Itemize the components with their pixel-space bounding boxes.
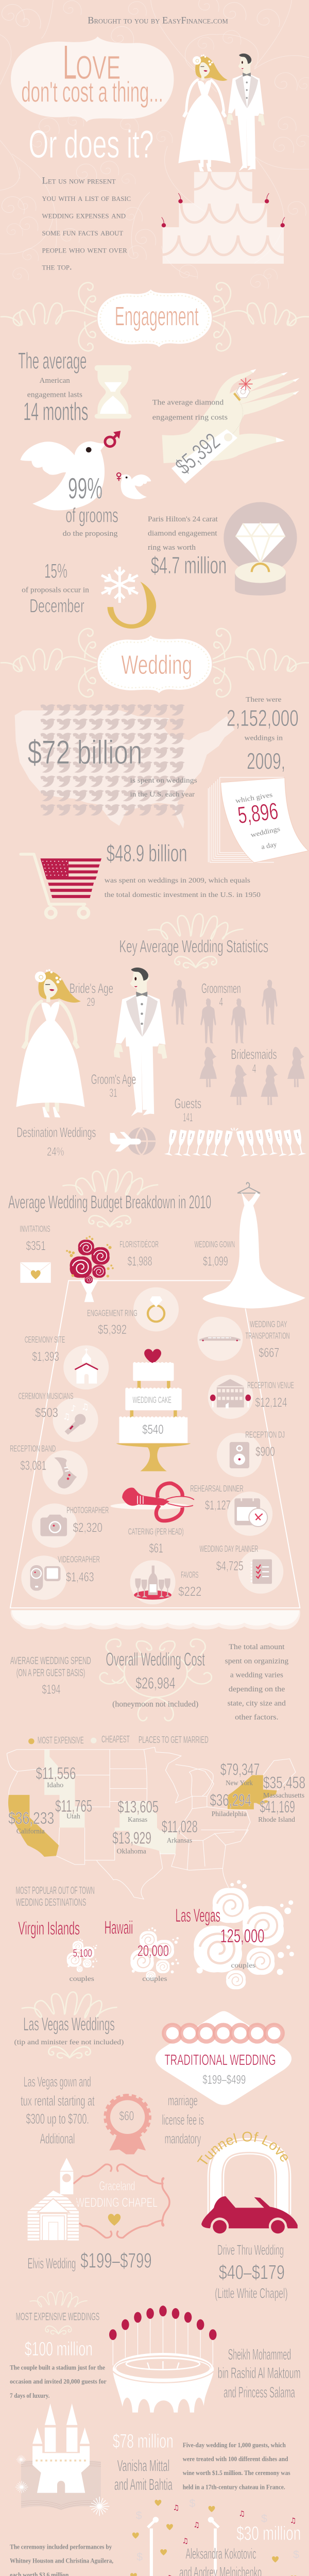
title: love don't cost a thing — [11, 36, 174, 122]
intro text — [42, 176, 131, 272]
icon: tear-off calendar: a day — [261, 840, 278, 851]
item: wedding day planner: $4,725 — [216, 1559, 244, 1573]
destination: las vegas: 125,000 — [220, 1925, 265, 1946]
stat: bride's age: 29 — [87, 995, 95, 1009]
map legend: MOST EXPENSIVE — [38, 1735, 84, 1746]
item: reception venue — [208, 1375, 294, 1419]
map labels: state costs: Massachusetts — [263, 1791, 304, 1799]
heading: most popular out of town destinations — [16, 1885, 95, 1908]
stat: 72 billion: $72 billion — [28, 734, 142, 771]
item: reception dj — [217, 1430, 285, 1477]
engagement banner — [1, 282, 308, 351]
text: ceremony performances: Whitney Houston and Christina Aguilera, — [10, 2557, 113, 2565]
stat: paris hilton ring: $4.7 million — [151, 552, 227, 579]
text: cost varies note: depending on the — [229, 1685, 285, 1693]
icon: microphones with hearts, notes and dollars: ♫ — [173, 2504, 179, 2512]
title text: don't cost a thing... — [21, 76, 163, 109]
destination: las vegas: couples — [231, 1961, 256, 1970]
wedding cake with cherries — [162, 172, 285, 264]
stat: destination weddings: 24% — [47, 1145, 64, 1158]
item: ceremony musicians: ♫ — [63, 1412, 71, 1421]
title banner — [11, 37, 174, 122]
stat: drive thru wedding — [215, 2242, 288, 2301]
map labels: state costs: New York — [226, 1779, 253, 1787]
item: rehearsal dinner lobster: REHEARSAL DINNER — [190, 1483, 244, 1494]
icon: small dove with female symbol — [117, 473, 151, 499]
icon: microphones with hearts, notes and dollars: $ — [293, 2549, 299, 2561]
item: videographer — [21, 1554, 100, 1600]
title text — [21, 36, 163, 109]
bridesmaids silhouettes — [199, 1046, 305, 1105]
bride on cake — [178, 55, 231, 172]
text: cost varies note: The total amount — [229, 1643, 285, 1651]
map legend: CHEAPEST — [101, 1734, 130, 1745]
map labels: state costs: Kansas — [128, 1816, 147, 1823]
text: five-day wedding: wine worth $1.5 million. The ceremony was — [183, 2469, 290, 2477]
text: marriage license fee: marriage — [168, 2093, 198, 2108]
item: catering: CATERING (PER HEAD) — [128, 1527, 184, 1536]
stat: 99 percent of grooms — [63, 472, 118, 538]
intro text: wedding expenses and — [42, 210, 126, 221]
engagement length text: American — [40, 377, 70, 385]
us map: wedding cost by state — [7, 1747, 296, 1899]
wedding: 100 million: The couple built a stadium just for the — [10, 2364, 105, 2371]
stat: 48.9 billion: the total domestic investment in the U.S. in 1950 — [105, 891, 261, 899]
item: engagement ring — [87, 1287, 179, 1337]
illustration: bride — [16, 969, 85, 1117]
ring cost text: The average diamond — [152, 399, 224, 407]
intro text: some fun facts about — [42, 227, 123, 238]
text: gown and tux rental: Additional — [40, 2131, 75, 2146]
subtitle: or does it: Or does it? — [28, 123, 153, 166]
text: cost varies note — [225, 1643, 289, 1722]
item: ceremony site — [25, 1334, 109, 1389]
item: ceremony musicians: CEREMONY MUSICIANS — [19, 1391, 73, 1401]
item: reception band: RECEPTION BAND — [10, 1444, 56, 1454]
icon: graceland wedding chapel sign — [73, 2164, 169, 2238]
heading: las vegas weddings: Las Vegas Weddings — [23, 2013, 115, 2035]
groom on cake — [227, 54, 265, 171]
icon: white chapel — [28, 2158, 79, 2241]
icon: microphones with hearts, notes and dollars: $ — [136, 2510, 142, 2522]
us map with dove grid — [15, 704, 234, 828]
item: transportation — [197, 1317, 289, 1361]
text: five-day wedding: held in a 17th-century chateau in France. — [183, 2484, 285, 2490]
icon: hand with ring and price tag: $5,392 — [170, 428, 225, 479]
destination: hawaii — [105, 1917, 179, 1983]
stat: bride's age — [70, 980, 113, 1009]
stat: 72 billion — [28, 734, 197, 799]
bridesmaids silhouettes: 4 — [252, 1062, 256, 1075]
map labels: state costs: Idaho — [47, 1781, 63, 1789]
icon: microphones with hearts, notes and dollars: ♫ — [182, 2537, 188, 2546]
destination: las vegas — [176, 1880, 294, 1989]
map labels: state costs: Arkansas — [167, 1837, 192, 1844]
heading: most expensive weddings — [16, 2291, 99, 2334]
stat: bride's age: Bride's Age — [70, 980, 113, 996]
icon: graceland wedding chapel sign: WEDDING CHAPEL — [76, 2196, 158, 2210]
vegas sign: traditional wedding — [156, 2011, 291, 2105]
stat: overall wedding cost: (honeymoon not included) — [112, 1700, 198, 1708]
stat: 72 billion: is spent on weddings — [130, 776, 197, 785]
icon: license badge: $60 — [119, 2109, 134, 2123]
map labels: state costs: Utah — [66, 1812, 80, 1820]
stat: 15 percent of proposals in december: 15% — [44, 560, 67, 582]
stat: elvis wedding: Elvis Wedding — [28, 2255, 76, 2272]
stat: average wedding spend: (ON A PER GUEST BASIS) — [16, 1668, 85, 1679]
engagement length text — [18, 348, 88, 426]
text: gown and tux rental: Las Vegas gown and — [24, 2074, 91, 2090]
stat: groom's age — [91, 1071, 136, 1099]
map labels: state costs: $13,929 — [112, 1829, 151, 1848]
stat: destination weddings — [17, 1125, 96, 1158]
item: wedding day planner — [200, 1544, 283, 1594]
map labels: state costs: Rhode Island — [258, 1816, 295, 1823]
table cloth — [11, 1610, 300, 1630]
stat: 99 percent of grooms: of grooms — [65, 504, 118, 527]
item: engagement ring: ENGAGEMENT RING — [87, 1308, 138, 1318]
engagement length text: engagement lasts — [27, 391, 82, 399]
stat: 72 billion: in the U.S. each year — [130, 790, 195, 799]
icon: shopping cart with us flag — [21, 854, 101, 918]
item: calendar and clock — [227, 1492, 272, 1536]
wedding banner: Wedding — [121, 650, 192, 680]
heading: most popular out of town destinations: WEDDING DESTINATIONS — [16, 1897, 86, 1908]
brought to you by line: Brought to you by EasyFinance.com — [88, 15, 228, 26]
stat: paris hilton ring: ring was worth — [148, 544, 196, 552]
icon: microphones with hearts, notes and dollars — [114, 2498, 299, 2576]
text: marriage license fee — [162, 2093, 204, 2146]
stat: 15 percent of proposals in december: December — [29, 596, 84, 617]
destination: virgin islands: 5,100 — [73, 1946, 92, 1959]
wedding: 100 million — [10, 2338, 107, 2399]
item: videographer: VIDEOGRAPHER — [58, 1554, 100, 1564]
item: catering — [128, 1527, 184, 1555]
map labels: state costs: Philadelphia — [212, 1810, 247, 1818]
stat: 48.9 billion — [105, 840, 261, 899]
groomsmen silhouettes: Groomsmen — [201, 980, 241, 996]
map labels: state costs — [8, 1760, 305, 1855]
text: cost varies note: other factors. — [235, 1714, 279, 1722]
stat: average wedding spend — [10, 1655, 91, 1697]
stat: overall wedding cost: $26,984 — [135, 1674, 176, 1692]
icon: row of champagne flutes — [164, 1128, 306, 1157]
stat: weddings in 2009: weddings in — [244, 734, 283, 742]
map labels: state costs: $13,605 — [117, 1798, 159, 1817]
text: gown and tux rental — [21, 2074, 95, 2146]
stat: average wedding spend: AVERAGE WEDDING SPEND — [10, 1655, 91, 1667]
item: reception band: $3,081 — [20, 1459, 46, 1473]
stat: overall wedding cost — [106, 1648, 205, 1708]
item: ceremony musicians: ♪ — [71, 1403, 76, 1413]
stat: overall wedding cost: Overall Wedding Cost — [106, 1648, 205, 1670]
destination: las vegas: Las Vegas — [176, 1905, 220, 1926]
icon: graceland wedding chapel sign: Graceland — [99, 2179, 135, 2194]
stat: 48.9 billion: $48.9 billion — [107, 840, 187, 867]
icon: tunnel of love with car: Tunnel Of Love — [197, 2132, 288, 2165]
ring cost text — [152, 399, 228, 421]
icon: stadium with balloons — [109, 2306, 217, 2413]
icon: plane and globe — [110, 1127, 156, 1155]
item: wedding cake on stand — [116, 1349, 191, 1471]
bridesmaids silhouettes: Bridesmaids — [231, 1046, 277, 1062]
engagement length text: The average — [18, 348, 87, 374]
decorative swirls background — [0, 0, 309, 289]
destination: hawaii: 20,000 — [138, 1943, 169, 1959]
stat: groom's age: 31 — [109, 1086, 117, 1099]
intro text: Let us now present — [42, 176, 116, 186]
text: MOST POPULAR OUT OF TOWN — [16, 1885, 95, 1896]
item: wedding gown: $1,099 — [203, 1255, 228, 1268]
stat: 99 percent of grooms: do the proposing — [63, 530, 118, 538]
text: cost varies note: spent on organizing — [225, 1657, 289, 1665]
intro text: the top. — [42, 262, 72, 272]
intro text: you with a list of basic — [42, 193, 131, 204]
item: wedding day planner: WEDDING DAY PLANNER — [200, 1544, 258, 1554]
map legend: PLACES TO GET MARRIED — [139, 1735, 209, 1745]
stat: 15 percent of proposals in december — [22, 560, 89, 617]
text: license fee is — [162, 2112, 204, 2128]
icon: tear-off calendar: which gives — [235, 791, 273, 805]
stat: paris hilton ring — [148, 515, 227, 579]
stat: guests — [175, 1096, 201, 1124]
heading: key average wedding statistics — [119, 914, 268, 968]
wedding: 100 million: 7 days of luxury. — [10, 2392, 49, 2399]
map legend — [28, 1734, 209, 1746]
icon: tear-off calendar — [208, 777, 308, 862]
map labels: state costs: California — [16, 1827, 45, 1835]
stat: guests: Guests — [175, 1096, 201, 1111]
icon: microphones with hearts, notes and dollars: ♫ — [238, 2510, 245, 2518]
stat: drive thru wedding: $40–$179 — [219, 2261, 285, 2283]
heading: las vegas weddings: (tip and minister fee not included) — [14, 2038, 124, 2046]
item: engagement ring: $5,392 — [98, 1323, 127, 1337]
heading: average wedding budget breakdown — [8, 1170, 211, 1227]
map labels: state costs: $11,028 — [162, 1818, 198, 1837]
destination: virgin islands: couples — [70, 1975, 94, 1983]
icon: hand with ring and price tag — [162, 369, 300, 484]
couple name: sheikh mohammed — [218, 2346, 301, 2401]
stat: 15 percent of proposals in december: of proposals occur in — [22, 586, 89, 594]
item: reception band — [10, 1444, 88, 1495]
ring cost text: engagement ring costs — [152, 414, 228, 421]
icon: microphones with hearts, notes and dollars: $ — [261, 2513, 267, 2524]
icon: tear-off calendar: weddings — [250, 825, 281, 839]
stat: 99 percent of grooms: 99% — [68, 472, 102, 505]
couple: 78 million wedding: and Amit Bahtia — [114, 2475, 173, 2494]
text: five-day wedding — [183, 2442, 290, 2490]
item: florist bouquet — [66, 1236, 159, 1302]
stat: 48.9 billion: was spent on weddings in 2009, which equals — [105, 876, 250, 885]
icon: microphones with hearts, notes and dollars: ♫ — [289, 2517, 297, 2525]
item: ceremony musicians — [19, 1391, 98, 1442]
map labels: state costs: $11,765 — [55, 1797, 92, 1816]
item: favors: $222 — [178, 1585, 201, 1599]
stat: average wedding spend: $194 — [42, 1683, 61, 1697]
wedding: 100 million: occasion and invited 20,000 guests for — [10, 2378, 107, 2385]
groomsmen silhouettes — [171, 980, 278, 1043]
map labels: state costs: $79,347 — [220, 1760, 260, 1779]
text: gown and tux rental: tux rental starting at — [21, 2093, 95, 2109]
stat: elvis wedding: $199–$799 — [80, 2248, 152, 2273]
destination: hawaii: couples — [142, 1975, 167, 1983]
item: rehearsal dinner lobster — [110, 1483, 244, 1521]
text: five-day wedding: were treated with 100 different dishes and — [183, 2455, 288, 2463]
table outline — [10, 1281, 300, 1608]
item: wedding gown — [195, 1182, 305, 1309]
map labels: state costs: $36,294 — [210, 1791, 251, 1810]
item: ceremony site: $1,393 — [32, 1350, 59, 1364]
text: five-day wedding: Five-day wedding for 1,000 guests, which — [183, 2442, 286, 2449]
couple: 78 million wedding: Vanisha Mittal — [117, 2456, 169, 2475]
text: ceremony performances: The ceremony included performances by — [10, 2544, 112, 2550]
item: reception dj: $900 — [255, 1445, 275, 1459]
destination: hawaii: Hawaii — [105, 1917, 133, 1938]
icon: microphones with hearts, notes and dollars: $ — [189, 2498, 195, 2510]
illustration: groom — [114, 968, 167, 1116]
stat: paris hilton ring: diamond engagement — [148, 530, 218, 537]
item: invitations: $351 — [26, 1239, 46, 1253]
couple: 30 million wedding — [179, 2522, 301, 2576]
icon: microphones with hearts, notes and dollars: ♫ — [193, 2521, 200, 2529]
engagement banner: Engagement — [115, 301, 199, 331]
item: invitations — [20, 1224, 51, 1283]
destination: virgin islands — [18, 1918, 97, 1983]
text: cost varies note: a wedding varies — [230, 1671, 283, 1680]
item: wedding cake on stand: WEDDING CAKE — [133, 1395, 171, 1405]
stat: elvis wedding — [28, 2248, 152, 2273]
couple: 78 million wedding: $78 million — [113, 2430, 174, 2452]
item: ceremony musicians: ♫ — [81, 1402, 89, 1412]
map labels: state costs: $36,233 — [8, 1809, 54, 1828]
item: videographer: $1,463 — [66, 1570, 94, 1584]
text: marriage license fee: mandatory — [165, 2131, 201, 2146]
heading: las vegas weddings — [14, 1992, 124, 2058]
couple: 78 million wedding — [113, 2430, 174, 2494]
item: favors: FAVORS — [181, 1570, 198, 1580]
icon: fairy tale book and castle — [15, 2403, 109, 2516]
item: florist bouquet: $1,988 — [128, 1255, 152, 1268]
icon: gold ring with snowflake — [101, 567, 156, 629]
groomsmen silhouettes: 4 — [219, 995, 223, 1009]
stat: weddings in 2009: There were — [246, 696, 281, 704]
icon: tunnel of love with car — [197, 2132, 298, 2234]
title text: OVE — [76, 49, 121, 86]
item: florist bouquet: FLORIST/DÉCOR — [119, 1239, 159, 1249]
map labels: state costs: $11,556 — [36, 1764, 76, 1783]
item: reception venue: $12,124 — [255, 1396, 287, 1410]
item: wedding cake on stand: $540 — [142, 1422, 164, 1437]
item: photographer — [32, 1503, 109, 1548]
icon: microphones with hearts, notes and dollars: $ — [136, 2551, 143, 2563]
item: ceremony site: CEREMONY SITE — [25, 1334, 65, 1345]
item: transportation: $667 — [259, 1346, 279, 1360]
icon: license badge — [106, 2096, 149, 2155]
item: ceremony musicians: $503 — [35, 1406, 58, 1420]
stat: paris hilton ring: Paris Hilton's 24 carat — [148, 515, 218, 523]
item: invitations: INVITATIONS — [20, 1224, 50, 1234]
vegas sign: traditional wedding: $199–$499 — [202, 2073, 246, 2087]
item: wedding gown: WEDDING GOWN — [195, 1239, 235, 1249]
stat: weddings in 2009 — [227, 696, 299, 774]
icon: diamond in ring box — [224, 502, 297, 596]
stat: groom's age: Groom's Age — [91, 1071, 136, 1087]
item: photographer: $2,320 — [73, 1521, 102, 1535]
heading: most expensive weddings: MOST EXPENSIVE WEDDINGS — [16, 2311, 99, 2323]
destination: virgin islands: Virgin Islands — [18, 1918, 80, 1939]
text: cost varies note: state, city size and — [228, 1700, 286, 1707]
engagement length text: 14 months — [23, 397, 88, 426]
stat: destination weddings: Destination Weddings — [17, 1125, 96, 1140]
item: catering: $61 — [149, 1541, 163, 1555]
stat: weddings in 2009: 2009, — [247, 748, 285, 774]
stat: guests: 141 — [183, 1111, 193, 1124]
item: favors — [130, 1560, 201, 1604]
text: gown and tux rental: $300 up to $700. — [26, 2111, 89, 2127]
icon: hourglass — [95, 365, 131, 419]
wedding: 100 million: $100 million — [25, 2338, 93, 2360]
item: rehearsal dinner lobster: $1,127 — [205, 1499, 231, 1513]
text: ceremony performances — [10, 2544, 113, 2576]
wedding banner — [1, 629, 308, 697]
item: photographer: PHOTOGRAPHER — [66, 1505, 109, 1515]
icon: tear-off calendar: 5,896 — [236, 798, 280, 828]
ornament: overall cost flourish — [100, 1639, 212, 1721]
intro text: people who went over — [42, 245, 127, 256]
title text: L — [63, 36, 77, 90]
icon: large dove with male symbol — [20, 431, 121, 511]
map labels: state costs: Oklahoma — [117, 1848, 146, 1855]
